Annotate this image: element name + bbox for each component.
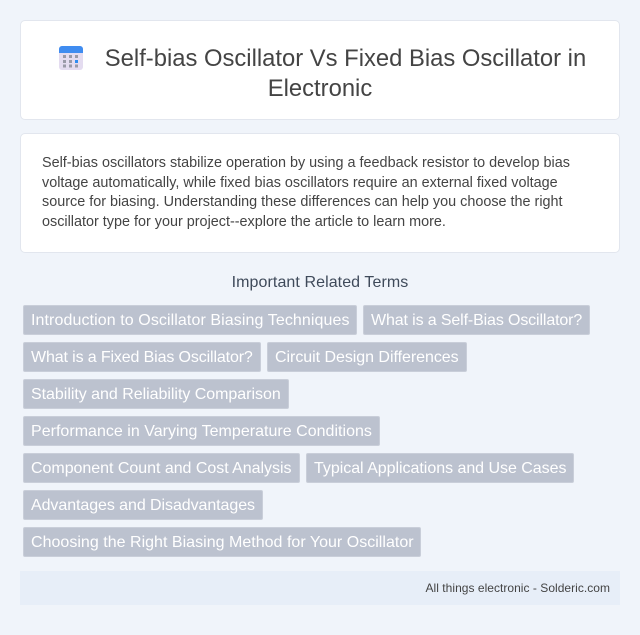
heading: related terms: Important Related Terms — [232, 274, 408, 291]
text block: introduction: oscillator type for your project--explore the article to learn more. — [42, 214, 446, 230]
footer — [20, 571, 620, 605]
title — [105, 45, 586, 102]
tag: Component Count and Cost Analysis — [31, 460, 292, 477]
tag — [23, 490, 263, 520]
tag — [306, 453, 574, 483]
tag — [267, 342, 467, 372]
tag: Typical Applications and Use Cases — [314, 460, 566, 477]
tag: Advantages and Disadvantages — [31, 497, 255, 514]
tag — [23, 305, 357, 335]
tag — [23, 379, 289, 409]
tag: Performance in Varying Temperature Conditions — [31, 423, 372, 440]
tag — [23, 416, 380, 446]
tag — [23, 453, 300, 483]
title: Electronic — [268, 74, 372, 102]
tag: Introduction to Oscillator Biasing Techniques — [31, 312, 350, 329]
panel: introduction — [20, 133, 620, 253]
text block: introduction: source for biasing. Understanding these differences can help you choose the right — [42, 194, 563, 210]
tag — [363, 305, 590, 335]
title: Self-bias Oscillator Vs Fixed Bias Oscillator in — [105, 45, 586, 72]
tag: Stability and Reliability Comparison — [31, 386, 281, 403]
icon: calendar — [59, 46, 83, 70]
text block: introduction — [42, 155, 570, 230]
tag: Circuit Design Differences — [275, 349, 459, 366]
panel: title card — [20, 20, 620, 120]
footer credit: All things electronic - Solderic.com — [426, 581, 610, 595]
text block: introduction: Self-bias oscillators stabilize operation by using a feedback resistor to develop bias — [42, 155, 570, 171]
tag — [23, 527, 421, 557]
text block: introduction: voltage automatically, while fixed bias oscillators require an external fixed voltage — [42, 175, 558, 191]
tag — [23, 342, 261, 372]
tag: Choosing the Right Biasing Method for Your Oscillator — [31, 534, 414, 551]
tag: What is a Self-Bias Oscillator? — [371, 312, 582, 329]
tag: What is a Fixed Bias Oscillator? — [31, 349, 253, 366]
panel: term tags — [23, 305, 590, 557]
